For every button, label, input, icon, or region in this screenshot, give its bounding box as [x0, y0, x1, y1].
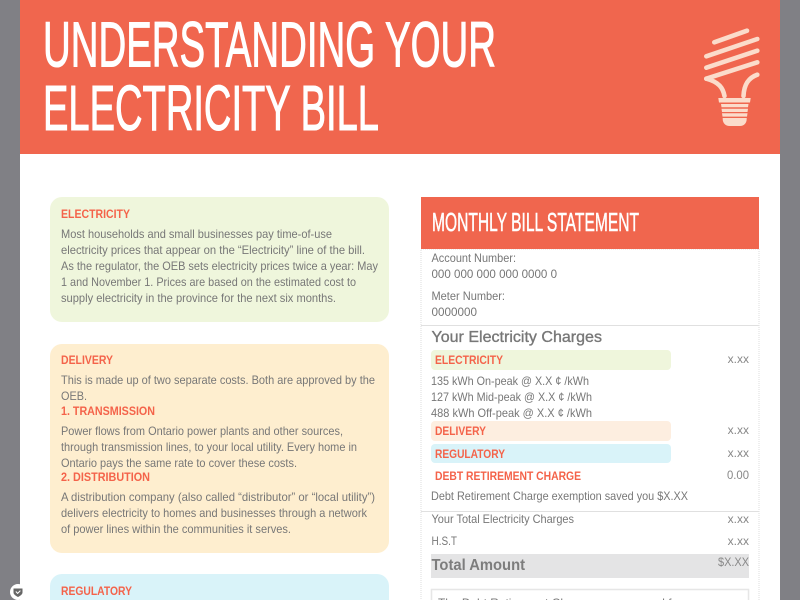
text block: transmission: through transmission lines, to your local utility. Every home in [61, 440, 357, 454]
text block: distribution: A distribution company (also called “distributor” or “local utility”) [61, 490, 375, 504]
row: debt retirement charge [435, 468, 749, 483]
text block: electricity description: supply electricity in the province for the next six months. [61, 291, 336, 305]
heading: your electricity charges: Your Electricity Charges [432, 329, 602, 346]
text block: electricity description: As the regulator, the OEB sets electricity prices twice a year: May [61, 259, 378, 273]
row: regulatory: REGULATORY [435, 449, 505, 461]
row: total electricity charges: Your Total Electricity Charges [432, 512, 574, 526]
account details [432, 251, 557, 319]
row: debt retirement charge: DEBT RETIREMENT CHARGE [435, 471, 581, 483]
row: hst: H.S.T [432, 534, 458, 548]
note: exemption: Debt Retirement Charge exemption saved you $X.XX [431, 489, 688, 503]
heading: delivery: DELIVERY [61, 355, 113, 367]
statement header: MONTHLY BILL STATEMENT [432, 207, 639, 237]
usage lines: 488 kWh Off-peak @ X.X ¢ /kWh [431, 406, 592, 420]
usage lines: 127 kWh Mid-peak @ X.X ¢ /kWh [431, 390, 592, 404]
text block: electricity description: Most households and small businesses pay time-of-use [61, 227, 332, 241]
text block: distribution: of power lines within the communities it serves. [61, 522, 291, 536]
text block: distribution [61, 490, 375, 536]
text block: transmission [61, 424, 357, 470]
row: regulatory: x.xx [728, 446, 749, 460]
row: delivery: x.xx [728, 423, 749, 437]
account details: 000 000 000 000 0000 0 [432, 267, 557, 281]
usage lines: 135 kWh On-peak @ X.X ¢ /kWh [431, 374, 589, 388]
text block: transmission: Ontario pays the same rate to cover these costs. [61, 456, 297, 470]
text block: distribution: delivers electricity to homes and businesses through a network [61, 506, 368, 520]
text block: delivery intro: This is made up of two separate costs. Both are approved by the [61, 373, 375, 387]
text block: delivery intro [61, 373, 375, 403]
row: hst [432, 534, 749, 548]
panel: monthly bill statement [421, 197, 759, 600]
row: electricity [431, 350, 749, 370]
row: total electricity charges: x.xx [728, 512, 749, 526]
panel: electricity [50, 197, 389, 322]
account details: Meter Number: [432, 289, 505, 303]
usage lines [431, 374, 592, 420]
subheading: distribution: 2. DISTRIBUTION [61, 472, 150, 484]
statement header [421, 197, 759, 249]
heading: electricity: ELECTRICITY [61, 209, 130, 221]
panel: delivery [50, 344, 389, 553]
row: hst: x.xx [728, 534, 749, 548]
row: debt retirement charge: 0.00 [727, 468, 749, 482]
account details: 0000000 [432, 305, 477, 319]
text block: electricity description [61, 227, 378, 305]
row: electricity: x.xx [728, 352, 749, 366]
text block: electricity description: electricity prices that appear on the “Electricity” line of the bill. [61, 243, 365, 257]
text block: transmission: Power flows from Ontario power plants and other sources, [61, 424, 343, 438]
row: total amount: Total Amount [432, 557, 526, 574]
text block: delivery intro: OEB. [61, 389, 87, 403]
row: total amount: $X.XX [718, 555, 749, 569]
row: total electricity charges [432, 512, 749, 526]
account details: Account Number: [432, 251, 516, 265]
row: total amount [431, 554, 749, 578]
icon: privacy badge [10, 584, 26, 600]
row: electricity: ELECTRICITY [435, 355, 503, 367]
header banner [20, 0, 780, 154]
text block: electricity description: 1 and November 1. Prices are based on the estimated cost to [61, 275, 356, 289]
row: delivery: DELIVERY [435, 426, 486, 438]
row: regulatory [431, 444, 749, 463]
note box [432, 590, 748, 600]
title: ELECTRICITY BILL [43, 72, 379, 144]
title: UNDERSTANDING YOUR [43, 8, 496, 80]
panel: regulatory [50, 574, 389, 600]
title [43, 8, 496, 144]
subheading: transmission: 1. TRANSMISSION [61, 406, 155, 418]
row: delivery [431, 421, 749, 441]
icon: light bulb [706, 31, 757, 126]
heading: regulatory: REGULATORY [61, 586, 132, 598]
